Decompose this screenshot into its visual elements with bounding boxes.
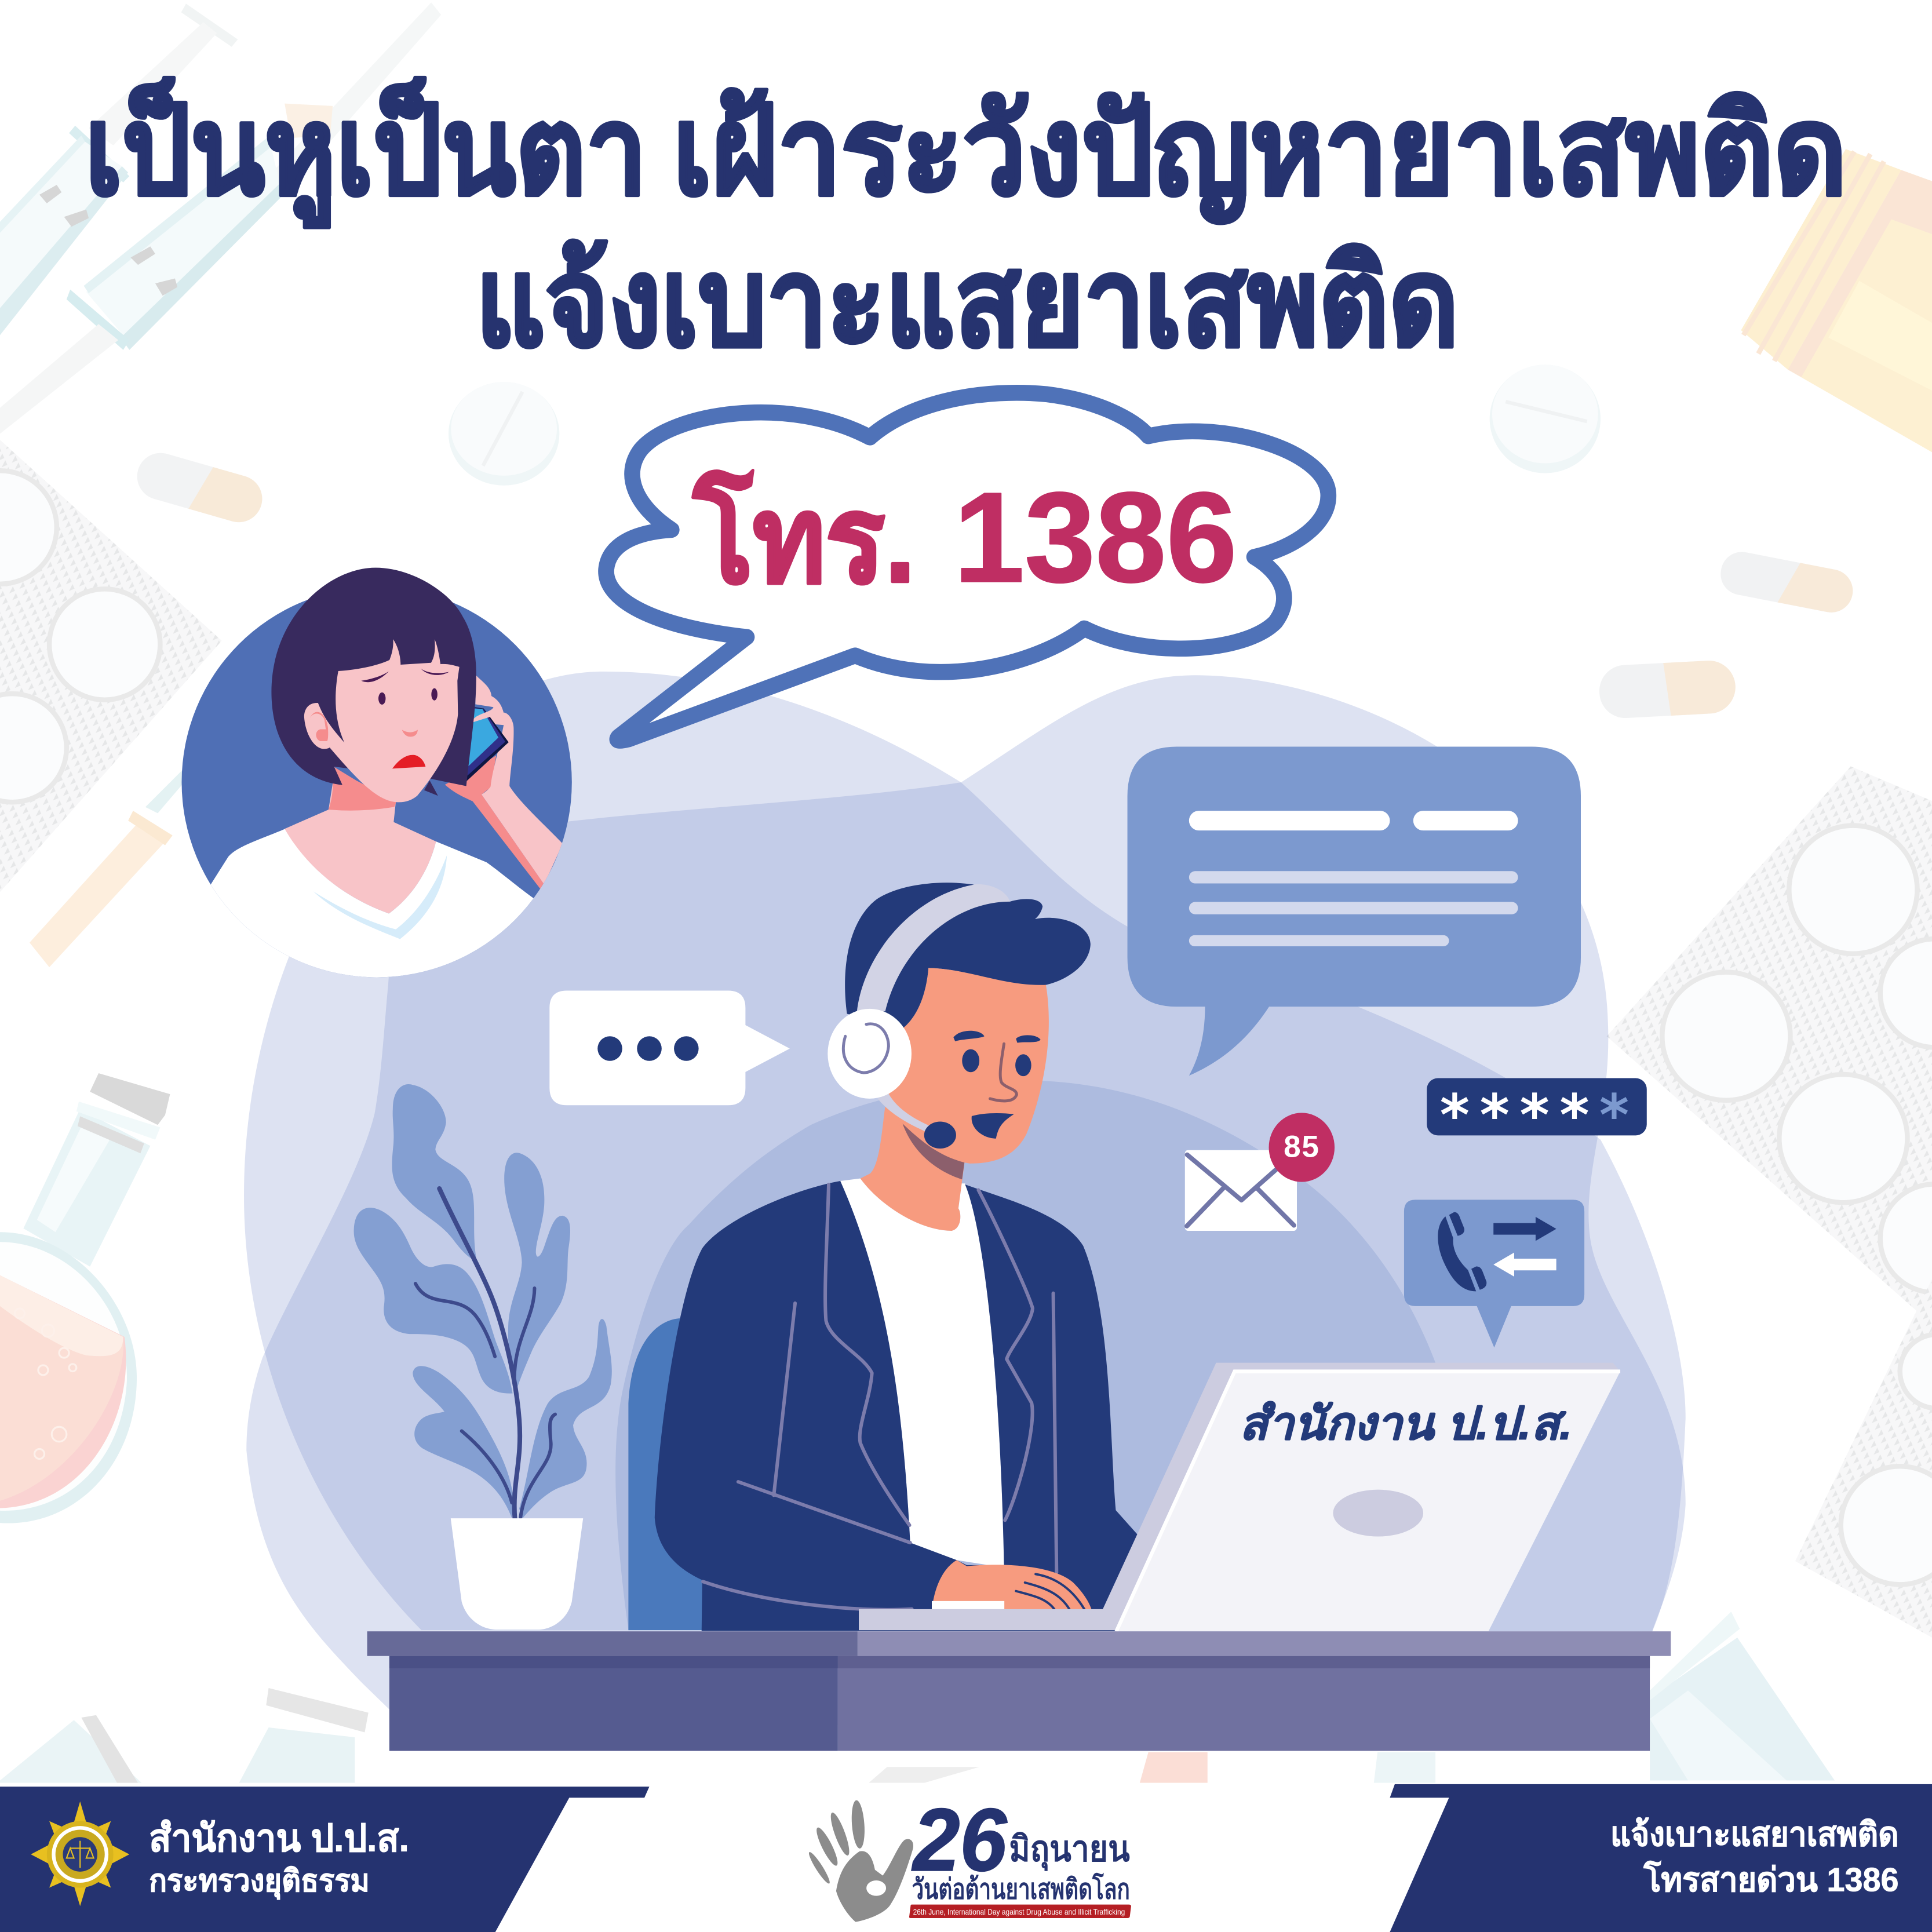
nose [402, 730, 418, 737]
emblem [31, 1802, 129, 1906]
face [329, 639, 460, 802]
face [884, 968, 1049, 1164]
english caption: 26th June, International Day against Drug Abuse and Illicit Trafficking [913, 1907, 1125, 1916]
call agent [655, 883, 1138, 1631]
glass vial lower right [1650, 1612, 1835, 1780]
laptop lid [1116, 1372, 1620, 1631]
title [85, 77, 1847, 371]
nose [990, 1044, 1016, 1101]
laptop label: สำนักงาน ป.ป.ส. [1240, 1398, 1572, 1449]
laptop base and lid back [859, 1363, 1620, 1630]
eyes [378, 688, 438, 705]
large message bubble [1128, 747, 1581, 1076]
microphone [924, 1122, 956, 1149]
password field: * [1519, 1082, 1550, 1149]
background blob lower [246, 782, 1686, 1725]
big 26: 26 [912, 1791, 1007, 1890]
eyebrows [361, 669, 449, 682]
office name: สำนักงาน ป.ป.ส. [149, 1817, 409, 1860]
arm, chest and shirt [211, 713, 563, 994]
background blob left/top [244, 672, 1686, 1631]
right capsule two [1598, 659, 1737, 719]
eyes and brows [953, 1031, 1041, 1139]
headset band [857, 884, 1010, 1011]
title: แจ้งเบาะแสยาเสพติด [476, 234, 1459, 371]
blister pack left [0, 440, 222, 892]
desk [367, 1631, 1671, 1751]
ear cup [828, 1009, 912, 1099]
syringe centre left [0, 2, 441, 433]
chair [628, 1318, 739, 1630]
hair [271, 568, 476, 786]
footer band [0, 1783, 1932, 1932]
laptop logo [1333, 1490, 1423, 1536]
jacket seams [703, 1184, 1056, 1610]
right capsule one [1721, 552, 1853, 613]
report line: แจ้งเบาะแสยาเสพติด [1610, 1816, 1899, 1853]
neck [861, 1106, 965, 1231]
icons in zoom coordinates [1185, 1113, 1584, 1348]
woman on the phone [182, 568, 572, 994]
hand print [806, 1800, 913, 1922]
yellow packet [1741, 149, 1932, 452]
hotline line: โทรสายด่วน 1386 [1643, 1860, 1899, 1898]
password field: * [1559, 1082, 1590, 1149]
hand [932, 1560, 1092, 1613]
footer left panel [0, 1787, 650, 1932]
neck shadow [902, 1124, 964, 1179]
pot [451, 1518, 583, 1630]
flask left [0, 1073, 170, 1523]
round tablet right [1490, 364, 1601, 473]
round tablet left [449, 382, 559, 486]
phone call bubble [1404, 1200, 1584, 1348]
title: เป็นหูเป็นตา [85, 77, 647, 228]
ellipsis chat bubble [549, 991, 790, 1105]
background arc behind agent [615, 1081, 1435, 1630]
test tube left [30, 770, 187, 967]
mouth [392, 755, 425, 768]
blue circle background [182, 587, 572, 977]
leaves [354, 1084, 612, 1518]
26 June logo [806, 1791, 1131, 1922]
plant [354, 1084, 612, 1630]
password field: * [1599, 1082, 1629, 1149]
stem and veins [415, 1189, 555, 1519]
headset boom [877, 1093, 930, 1133]
finger lines [1016, 1574, 1085, 1610]
hotline number: 1386 [954, 466, 1237, 609]
left capsule [137, 453, 262, 523]
bottom vials [0, 1688, 1435, 1783]
password field: * [1480, 1082, 1510, 1149]
envelope with badge [1185, 1113, 1335, 1231]
title: เฝ้าระวังปัญหายาเสพติด [673, 83, 1847, 224]
blister pack right [1607, 767, 1932, 1325]
english caption [909, 1905, 1131, 1918]
ear [304, 703, 340, 749]
month: มิถุนายน [1009, 1829, 1130, 1871]
day name: วันต่อต้านยาเสพติดโลก [912, 1872, 1130, 1905]
footer right panel [1390, 1784, 1932, 1932]
password field: * [1440, 1082, 1470, 1149]
fingers [473, 675, 504, 723]
password field [1427, 1078, 1647, 1149]
shirt [840, 1179, 1004, 1568]
blister pack lower right [1795, 1279, 1932, 1638]
ministry name: กระทรวงยุติธรรม [149, 1864, 370, 1900]
badge count: 85 [1284, 1130, 1320, 1164]
phone [466, 707, 509, 782]
hair [845, 883, 1091, 1028]
jacket [655, 1181, 1138, 1631]
hair side lock [312, 671, 344, 742]
speech cloud with hotline [606, 393, 1328, 741]
syringe top left [0, 3, 238, 335]
hotline label: โทร. [692, 471, 916, 608]
